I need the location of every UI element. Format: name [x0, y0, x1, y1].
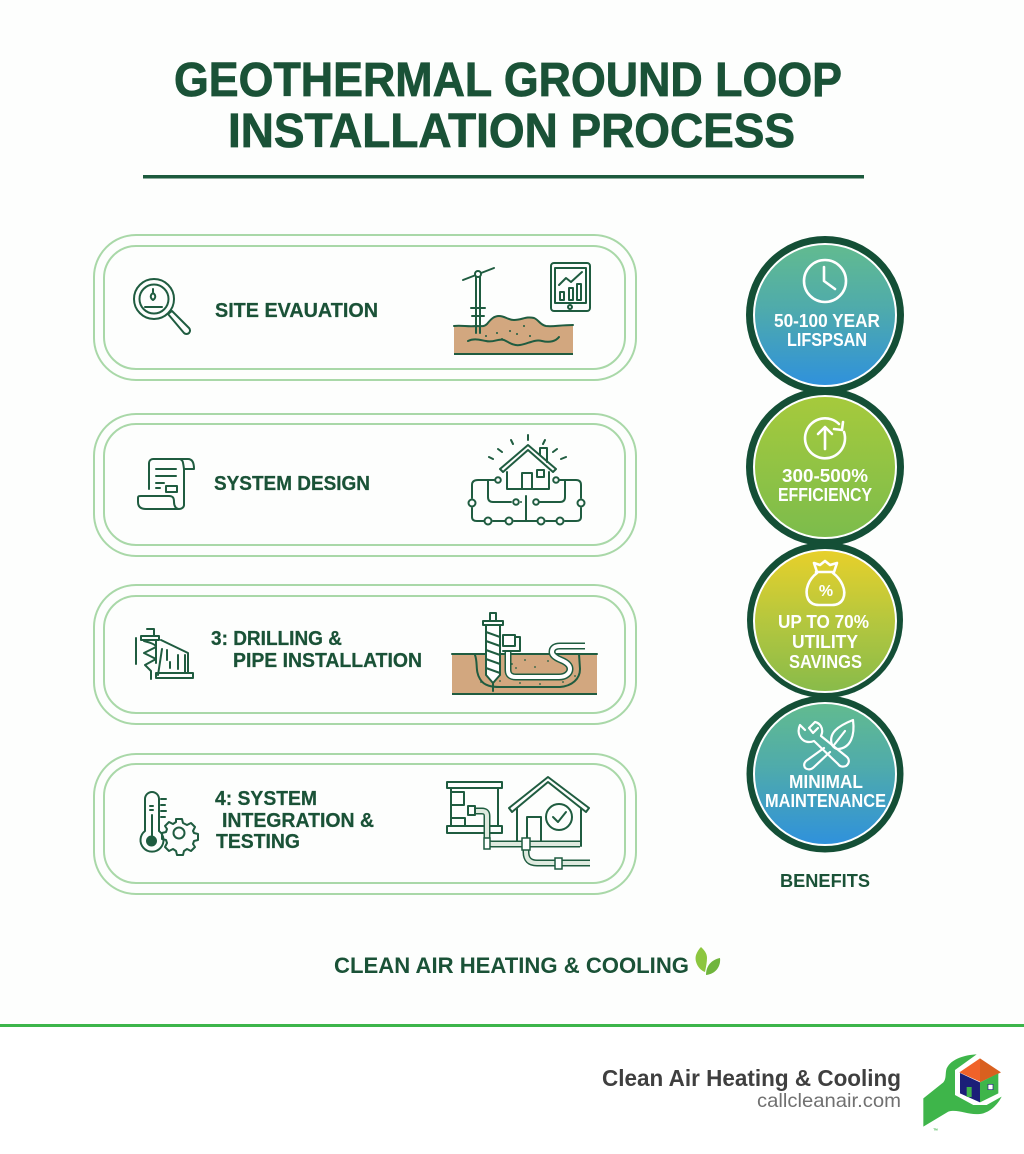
brand line: CLEAN AIR HEATING & COOLING [334, 953, 689, 978]
icon: magnifying glass [134, 279, 190, 334]
footer company text: Clean Air Heating & Cooling [602, 1065, 901, 1091]
footer company text: callcleanair.com [757, 1090, 901, 1112]
badge text: MAINTENANCE [765, 791, 886, 811]
panel: step 1 site evaluation [94, 235, 636, 380]
badge text: UTILITY [792, 632, 858, 652]
badge text: 50-100 YEAR [774, 311, 880, 331]
badge text: SAVINGS [789, 652, 862, 672]
illustration: soil survey with tablet [454, 263, 590, 355]
footer rule [0, 1024, 1024, 1027]
badge text [765, 772, 886, 811]
step label [211, 628, 422, 672]
icon: money bag [807, 561, 844, 605]
icon: clock [804, 260, 846, 302]
icon: leaves [696, 947, 720, 975]
illustration: house connected to heat pump [447, 777, 590, 869]
badge: minimal maintenance [746, 696, 904, 852]
badge: lifespan [746, 236, 904, 394]
badge text: UP TO 70% [778, 612, 869, 632]
step label: SYSTEM DESIGN [214, 473, 370, 495]
badge text: MINIMAL [789, 772, 863, 792]
badge text: LIFSPSAN [787, 330, 867, 350]
step label: 4: SYSTEM [215, 788, 317, 810]
title [174, 54, 842, 158]
badge text [778, 612, 869, 672]
logo: wrench and house [923, 1054, 1002, 1132]
icon: document scroll [138, 459, 194, 509]
title: INSTALLATION PROCESS [228, 105, 795, 158]
title: GEOTHERMAL GROUND LOOP [174, 54, 842, 107]
step label: 3: DRILLING & [211, 628, 342, 650]
step label: PIPE INSTALLATION [233, 650, 422, 672]
icon: wrench and leaf [799, 720, 853, 769]
footer company text [602, 1065, 901, 1112]
illustration: borehole with ground loop pipe [452, 613, 597, 695]
step label [215, 788, 374, 853]
illustration: house with loop circuit [468, 435, 584, 524]
icon: drill rig [136, 629, 193, 679]
badge text: EFFICIENCY [778, 485, 872, 505]
icon: circular up arrow [805, 418, 845, 458]
panel: step 3 drilling and pipe installation [94, 585, 636, 724]
panel: step 2 system design [94, 414, 636, 556]
logo: wrench and house: TM [933, 1128, 938, 1132]
benefits caption: BENEFITS [780, 871, 870, 891]
panel: step 4 system integration and testing [94, 754, 636, 894]
badge text: 300-500% [782, 466, 868, 486]
icon: thermometer and gear [140, 792, 198, 855]
icon: money bag: % [819, 583, 833, 600]
step label: TESTING [216, 831, 300, 853]
step label: INTEGRATION & [222, 810, 374, 832]
badge: utility savings [747, 542, 903, 698]
badge text [778, 466, 872, 505]
badge text [774, 311, 880, 350]
badge: efficiency [746, 388, 904, 546]
step label: SITE EVAUATION [215, 300, 378, 322]
